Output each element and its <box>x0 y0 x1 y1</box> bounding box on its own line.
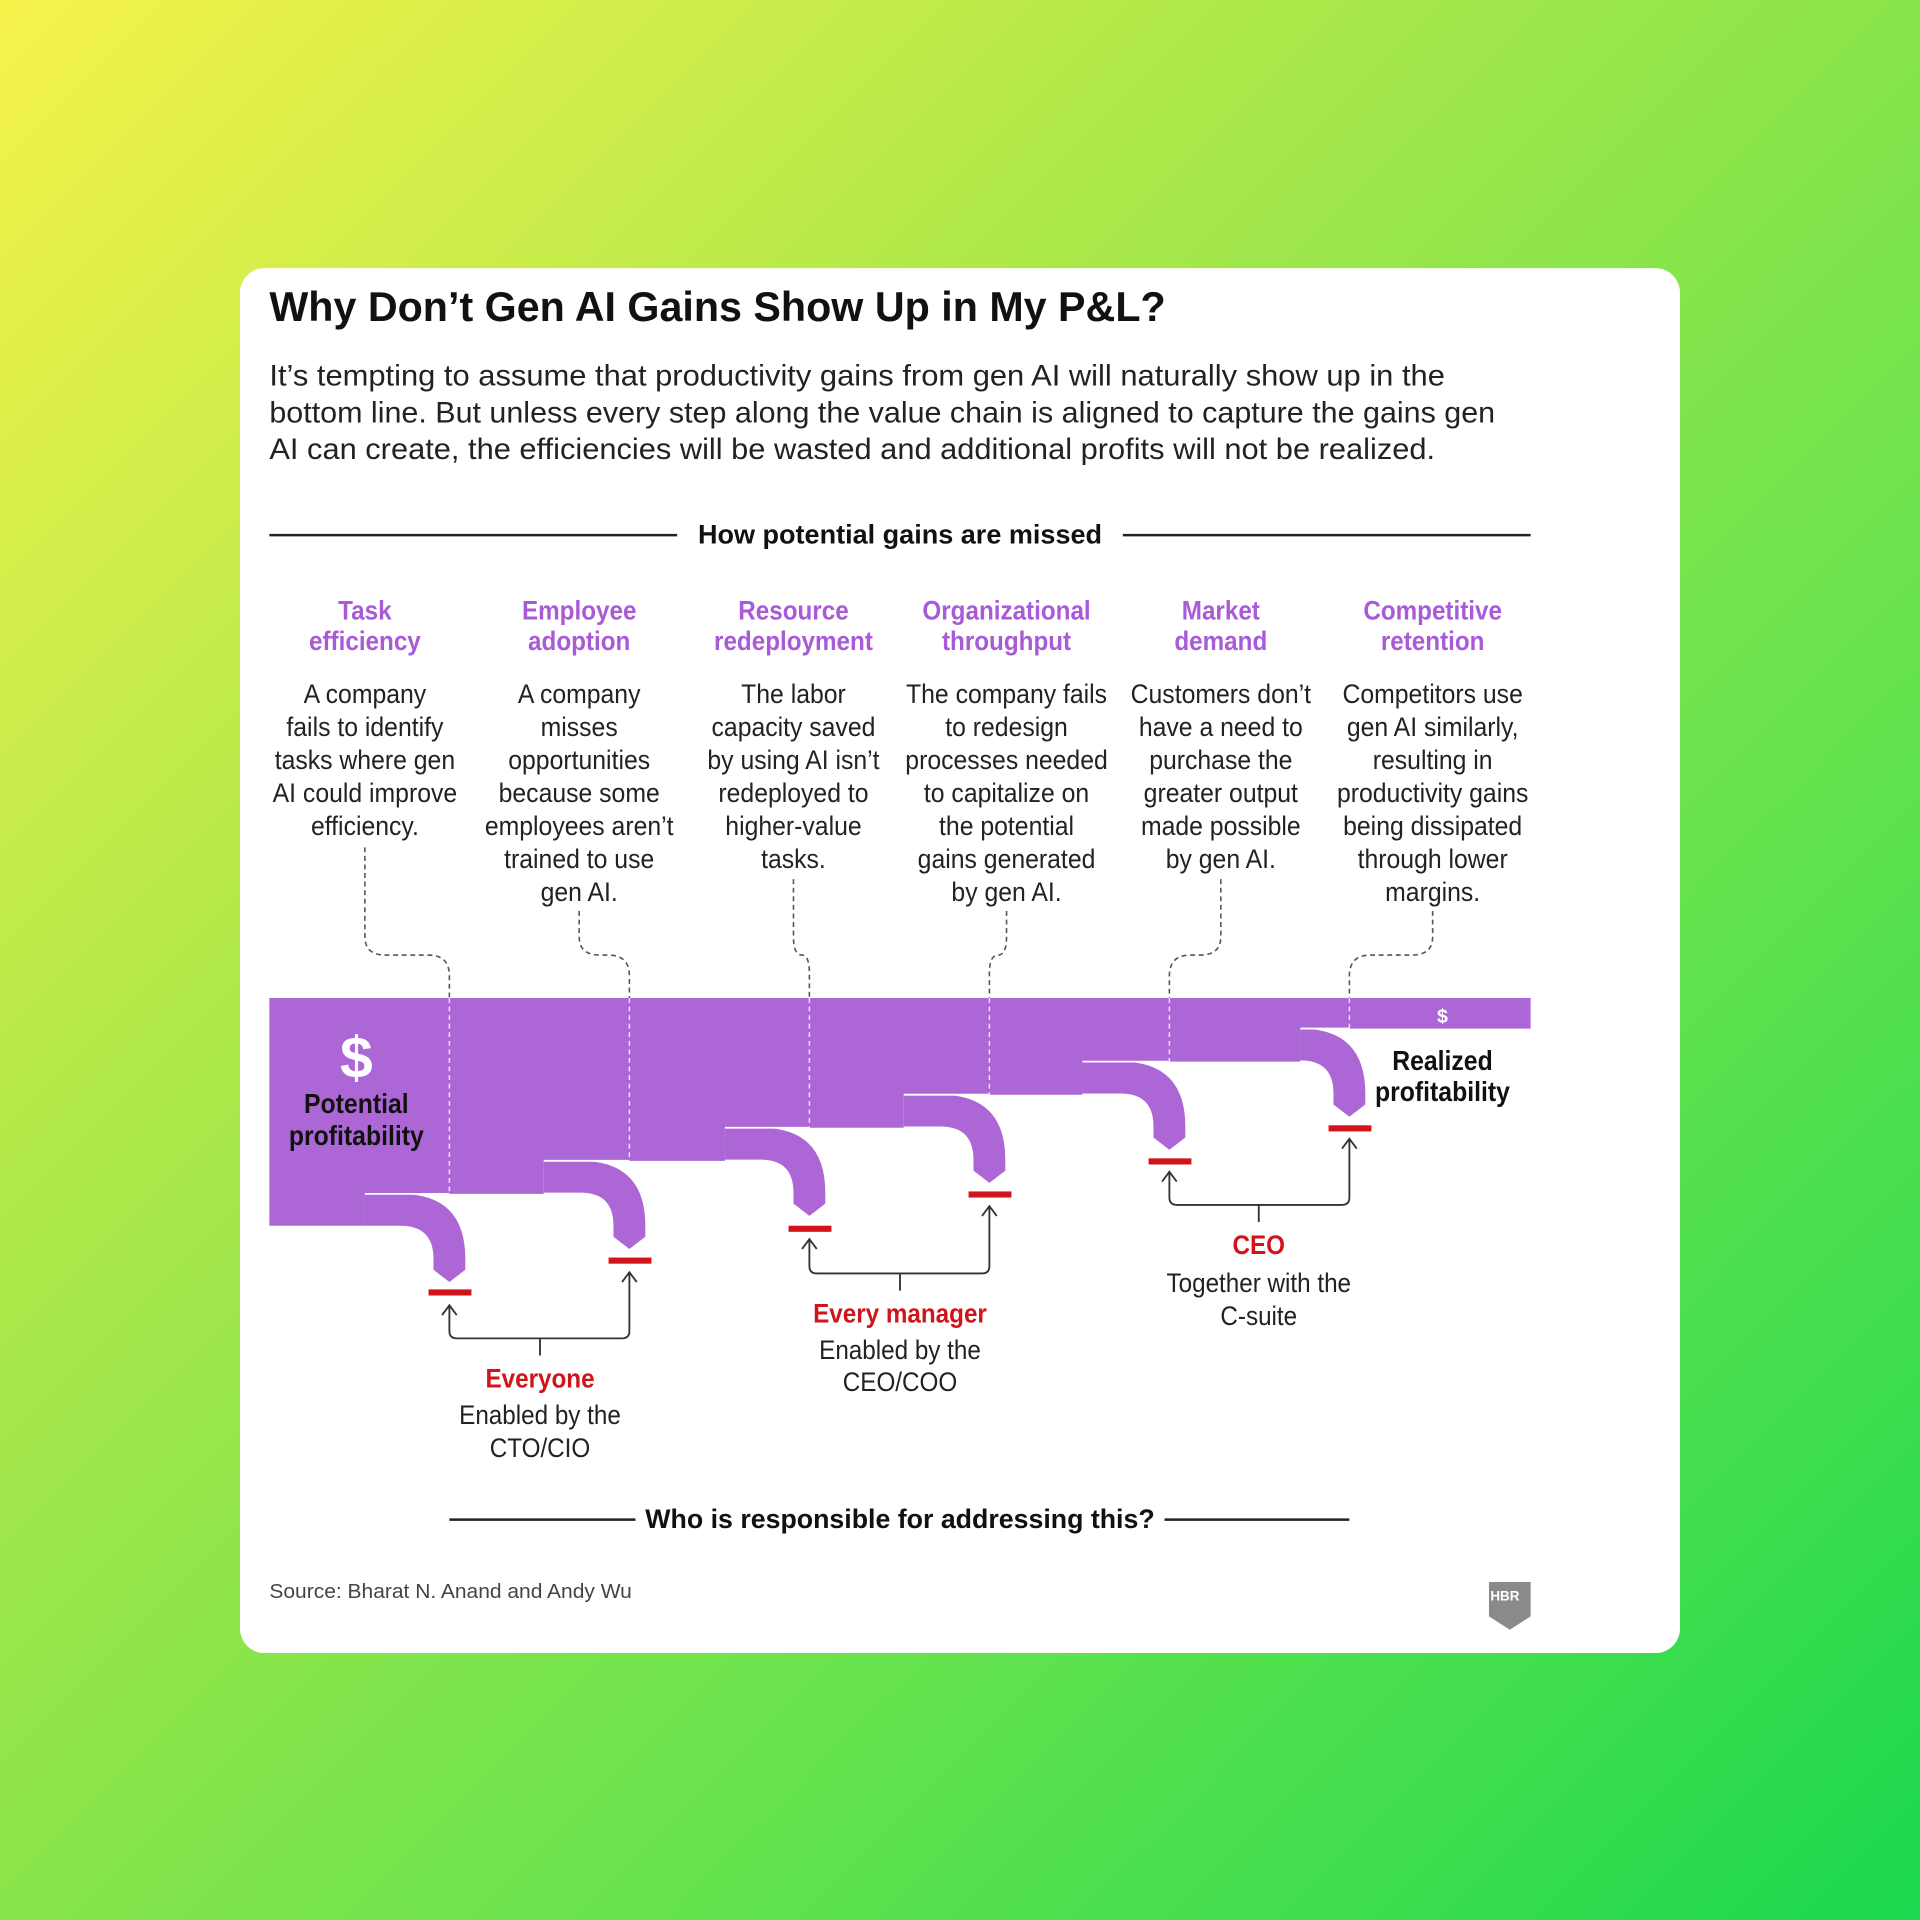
column descriptions: The labor <box>741 680 846 709</box>
column descriptions: AI could improve <box>273 779 457 808</box>
column headings: demand <box>1174 627 1267 657</box>
dashed connectors <box>365 847 1433 998</box>
column descriptions: employees aren’t <box>485 812 674 841</box>
icon: HBR logo: HBR <box>1490 1588 1520 1603</box>
responsibility: everyone: CTO/CIO <box>490 1434 590 1463</box>
column descriptions: by gen AI. <box>1166 845 1276 874</box>
responsibility: every manager: CEO/COO <box>843 1368 957 1397</box>
section heading: how gains are missed: How potential gains are missed <box>698 520 1102 550</box>
column descriptions: A company <box>518 680 641 709</box>
responsibility: every manager: Enabled by the <box>819 1336 981 1365</box>
column descriptions: by gen AI. <box>951 878 1062 907</box>
responsibility: CEO: Together with the <box>1167 1269 1351 1298</box>
column descriptions: fails to identify <box>286 713 443 742</box>
column descriptions: misses <box>541 713 618 742</box>
responsibility: CEO: CEO <box>1233 1231 1285 1260</box>
responsibility: everyone: Everyone <box>485 1364 595 1394</box>
source: Source: Bharat N. Anand and Andy Wu <box>269 1581 632 1603</box>
column descriptions: because some <box>499 779 660 808</box>
label: realized profitability: $ <box>1437 1005 1448 1027</box>
column descriptions: opportunities <box>508 746 650 775</box>
column descriptions: by using AI isn’t <box>707 746 880 775</box>
column descriptions: through lower <box>1358 845 1508 874</box>
column descriptions <box>273 680 1528 907</box>
card <box>240 268 1680 1653</box>
red stop marks <box>429 1125 1371 1296</box>
column descriptions: capacity saved <box>712 713 875 742</box>
column headings: redeployment <box>714 627 873 657</box>
column descriptions: margins. <box>1385 878 1480 907</box>
column headings: adoption <box>528 627 630 657</box>
column descriptions: being dissipated <box>1343 812 1522 841</box>
column descriptions: tasks. <box>761 845 826 874</box>
column descriptions: have a need to <box>1139 713 1303 742</box>
label: realized profitability <box>1375 1005 1510 1107</box>
responsibility: CEO: C-suite <box>1220 1302 1297 1331</box>
section heading: who is responsible: Who is responsible for addressing this? <box>645 1504 1155 1534</box>
responsibility brackets <box>442 1139 1357 1356</box>
column descriptions: to redesign <box>945 713 1068 742</box>
column headings <box>309 596 1502 657</box>
column descriptions: greater output <box>1144 779 1298 808</box>
column descriptions: gen AI. <box>541 878 618 907</box>
column descriptions: the potential <box>939 812 1074 841</box>
column headings: Organizational <box>922 596 1091 626</box>
label: realized profitability: profitability <box>1375 1075 1510 1107</box>
intro text: It’s tempting to assume that productivity gains from gen AI will naturally show up in the <box>269 360 1445 393</box>
responsibility: every manager <box>813 1299 987 1397</box>
column headings: Employee <box>522 596 636 626</box>
flow bar: potential to realized profitability <box>269 998 1531 1282</box>
responsibility: CEO <box>1167 1231 1351 1331</box>
column descriptions: gen AI similarly, <box>1347 713 1518 742</box>
column descriptions: gains generated <box>918 845 1095 874</box>
column descriptions: higher-value <box>725 812 862 841</box>
label: potential profitability: Potential <box>304 1088 409 1119</box>
intro text <box>269 360 1495 466</box>
column headings: retention <box>1381 627 1484 657</box>
column descriptions: redeployed to <box>718 779 869 808</box>
column headings: throughput <box>942 627 1072 657</box>
column descriptions: processes needed <box>905 746 1108 775</box>
label: potential profitability <box>289 1026 424 1151</box>
column descriptions: productivity gains <box>1337 779 1528 808</box>
column descriptions: The company fails <box>906 680 1107 709</box>
column descriptions: Competitors use <box>1342 680 1523 709</box>
column descriptions: trained to use <box>504 845 654 874</box>
column headings: Task <box>338 596 392 626</box>
label: potential profitability: $ <box>340 1026 373 1091</box>
column descriptions: Customers don’t <box>1131 680 1311 709</box>
intro text: AI can create, the efficiencies will be wasted and additional profits will not be realized. <box>269 433 1435 466</box>
column headings: efficiency <box>309 627 421 657</box>
column descriptions: made possible <box>1141 812 1301 841</box>
responsibility: every manager: Every manager <box>813 1299 987 1329</box>
column descriptions: A company <box>304 680 426 709</box>
title: Why Don’t Gen AI Gains Show Up in My P&L? <box>269 283 1166 330</box>
column headings: Market <box>1182 596 1260 626</box>
label: realized profitability: Realized <box>1392 1045 1493 1077</box>
column descriptions: tasks where gen <box>275 746 455 775</box>
icon: HBR logo <box>1489 1582 1531 1630</box>
column headings: Resource <box>738 596 849 626</box>
column headings: Competitive <box>1363 596 1502 626</box>
column descriptions: resulting in <box>1373 746 1493 775</box>
label: potential profitability: profitability <box>289 1119 424 1151</box>
intro text: bottom line. But unless every step along the value chain is aligned to capture the gains gen <box>269 396 1495 429</box>
column descriptions: to capitalize on <box>924 779 1089 808</box>
responsibility: everyone: Enabled by the <box>459 1401 621 1430</box>
responsibility: everyone <box>459 1364 621 1463</box>
column descriptions: efficiency. <box>311 812 419 841</box>
column descriptions: purchase the <box>1149 746 1292 775</box>
